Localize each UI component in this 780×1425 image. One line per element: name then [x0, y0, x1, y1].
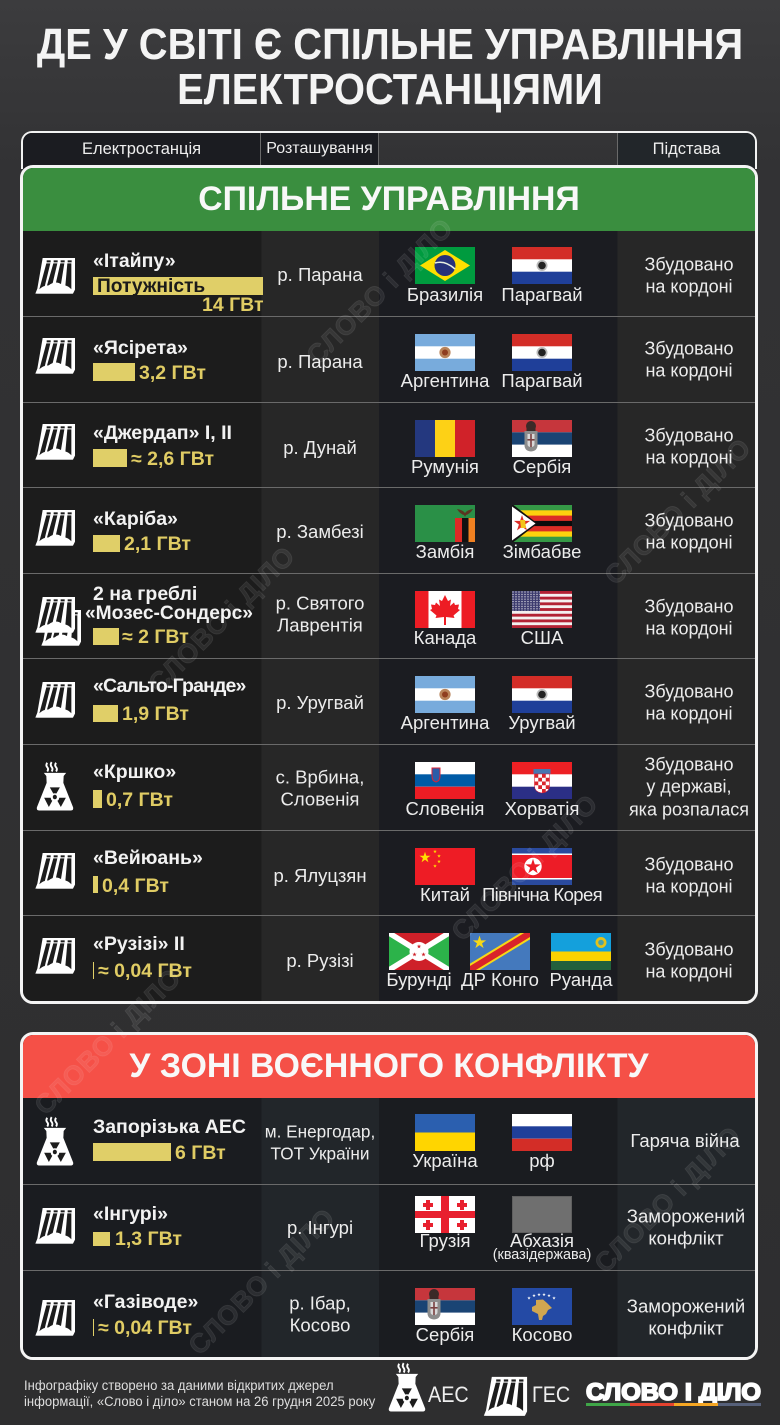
basis: Збудовано [644, 426, 734, 446]
icon: hydro plant [35, 682, 75, 718]
footer source note: інформації, «Слово і діло» станом на 26 грудня 2025 року [24, 1394, 375, 1409]
country label: Парагвай [501, 284, 583, 305]
plant name: 2 на греблі [93, 583, 197, 605]
capacity bar [93, 1319, 94, 1336]
panel: joint management [20, 165, 758, 1004]
basis: Збудовано [644, 255, 734, 275]
legend: nuclear plant: АЕС [428, 1382, 469, 1407]
location: р. Ялуцзян [273, 865, 367, 886]
basis: Збудовано [644, 855, 734, 875]
capacity bar [93, 790, 102, 808]
country label: Абхазія [510, 1230, 574, 1251]
flag: Burundi [389, 933, 449, 970]
flag: Argentina [415, 334, 475, 371]
location: р. Замбезі [276, 521, 364, 542]
country label: Парагвай [501, 370, 583, 391]
basis: Збудовано [644, 339, 734, 359]
country label: Зімбабве [503, 541, 581, 562]
row: Moses-Saunders [23, 573, 755, 658]
location: р. Святого [276, 593, 364, 614]
flag: Kosovo [512, 1288, 572, 1325]
country label: Китай [420, 884, 470, 905]
basis: на кордоні [645, 619, 733, 639]
flag: Croatia [512, 762, 572, 799]
capacity bar [93, 962, 94, 979]
capacity bar [93, 705, 118, 722]
basis: Заморожений [627, 1206, 745, 1227]
row: Krsko [23, 744, 755, 830]
basis: на кордоні [645, 704, 733, 724]
country label: Північна Корея [482, 884, 602, 905]
flag: Zambia [415, 505, 475, 542]
basis: Збудовано [644, 511, 734, 531]
icon: hydro plant [35, 853, 75, 889]
basis: Заморожений [627, 1296, 745, 1317]
capacity value: 1,9 ГВт [122, 703, 189, 725]
row: Zaporizhzhia NPP [23, 1098, 755, 1184]
plant name: «Кршко» [93, 761, 176, 783]
status note: (квазідержава) [493, 1247, 591, 1263]
country label: ДР Конго [461, 969, 539, 990]
basis: на кордоні [645, 533, 733, 553]
watermarks: СЛОВО і ДІЛО [446, 789, 604, 947]
icon: hydro plant [30, 1294, 85, 1342]
location: р. Рузізі [286, 950, 354, 971]
capacity bar [93, 628, 119, 645]
capacity bar [93, 1143, 171, 1161]
capacity value: 0,7 ГВт [106, 789, 173, 811]
flag: Canada [415, 591, 475, 628]
flag: Slovenia [415, 762, 475, 799]
title: ДЕ У СВІТІ Є СПІЛЬНЕ УПРАВЛІННЯ [37, 21, 743, 69]
row: Itaipu [23, 231, 755, 316]
row: Yacyreta [23, 316, 755, 402]
flag: Brazil [415, 247, 475, 284]
logo: Slovo i Dilo: СЛОВО І ДІЛО [586, 1379, 761, 1406]
watermarks: СЛОВО і ДІЛО [143, 541, 301, 699]
flag: Zimbabwe [512, 505, 572, 542]
capacity value: ≈ 2 ГВт [122, 626, 189, 648]
basis: на кордоні [645, 277, 733, 297]
basis [644, 426, 734, 468]
location: р. Парана [277, 351, 363, 372]
plant name: «Сальто-Гранде» [93, 675, 246, 697]
country label: Словенія [406, 798, 484, 819]
icon: hydro plant [35, 938, 75, 974]
location: р. Ібар, [289, 1293, 351, 1314]
country label: Косово [512, 1324, 572, 1345]
basis: на кордоні [645, 877, 733, 897]
basis [629, 755, 749, 820]
capacity value: ≈ 0,04 ГВт [98, 960, 192, 982]
country label: Уругвай [508, 712, 576, 733]
capacity bar [93, 449, 127, 467]
plant name [85, 583, 253, 624]
capacity value: ≈ 2,6 ГВт [131, 448, 214, 470]
location: ТОТ України [270, 1144, 370, 1164]
basis [627, 1206, 745, 1250]
capacity value: 14 ГВт [202, 294, 264, 316]
country label: Грузія [420, 1230, 470, 1251]
plant name: Запорізька АЕС [93, 1116, 246, 1138]
location: р. Парана [277, 264, 363, 285]
location: р. Інгурі [287, 1217, 353, 1238]
capacity value: 3,2 ГВт [139, 362, 206, 384]
flag: Romania [415, 420, 475, 457]
flag: Rwanda [551, 933, 611, 970]
capacity bar [93, 1232, 110, 1246]
watermarks: СЛОВО і ДІЛО [183, 1203, 341, 1361]
country label: Румунія [411, 456, 479, 477]
flag: China [415, 848, 475, 885]
row: Djerdap [23, 402, 755, 487]
icon: hydro plant [35, 424, 75, 460]
heading: war conflict zone: У ЗОНІ ВОЄННОГО КОНФЛІКТУ [129, 1047, 649, 1085]
flag: Serbia [512, 420, 572, 457]
plant name: «Ясірета» [93, 337, 188, 359]
basis: Гаряча війна [630, 1130, 740, 1151]
column header: location [261, 133, 379, 169]
country label: Хорватія [505, 798, 579, 819]
location: Лаврентія [277, 615, 363, 636]
flag: Georgia [415, 1196, 475, 1233]
location [289, 1293, 351, 1337]
country label: рф [529, 1150, 555, 1171]
watermarks: СЛОВО і ДІЛО [599, 433, 757, 591]
column header: basis: Підстава [653, 140, 720, 158]
icon: hydro plant [35, 510, 75, 546]
plant name: «Вейюань» [93, 847, 203, 869]
basis: на кордоні [645, 448, 733, 468]
icon: two hydro plants [35, 597, 81, 646]
country label: Бурунді [386, 969, 452, 990]
basis: Збудовано [644, 682, 734, 702]
capacity value: 1,3 ГВт [115, 1228, 182, 1250]
plant name: «Мозес-Сондерс» [85, 603, 253, 624]
row: Kariba [23, 487, 755, 573]
icon: hydro plant [35, 338, 75, 374]
row: Enguri [23, 1184, 755, 1270]
column header: power plant [23, 133, 261, 169]
country label: Аргентина [401, 712, 489, 733]
basis: яка розпалася [629, 799, 749, 819]
table header row [21, 131, 757, 169]
location [276, 767, 364, 810]
heading: joint management [23, 168, 755, 231]
footer source note: Інфографіку створено за даними відкритих джерел [24, 1378, 334, 1393]
flag: Serbia [415, 1288, 475, 1325]
plant name: «Рузізі» II [93, 933, 185, 955]
basis: конфлікт [648, 1318, 724, 1339]
flag: Paraguay [512, 247, 572, 284]
legend: nuclear plant [381, 1359, 472, 1417]
location: м. Енергодар, [265, 1122, 375, 1142]
basis: Збудовано [644, 755, 734, 775]
footer source note [24, 1378, 375, 1410]
plant name: «Каріба» [93, 508, 178, 530]
country label: Україна [412, 1150, 478, 1171]
country label: Аргентина [401, 370, 489, 391]
plant name: «Джердап» I, II [93, 422, 232, 444]
location: Косово [290, 1315, 350, 1336]
flag: USA [512, 591, 572, 628]
capacity bar [93, 363, 134, 381]
country label: Руанда [550, 969, 612, 990]
flag: Argentina [415, 676, 475, 713]
basis: конфлікт [648, 1228, 724, 1249]
basis [644, 682, 734, 724]
watermarks: СЛОВО і ДІЛО [589, 1121, 747, 1279]
basis [644, 939, 734, 983]
basis [627, 1296, 745, 1340]
capacity bar with label [93, 277, 263, 295]
capacity value: ≈ 0,04 ГВт [98, 1317, 192, 1339]
country label: Сербія [416, 1324, 474, 1345]
country label: Бразилія [407, 284, 483, 305]
location: с. Врбина, [276, 767, 364, 788]
flag: russia [512, 1114, 572, 1151]
country label: Замбія [416, 541, 474, 562]
title: ЕЛЕКТРОСТАНЦІЯМИ [177, 66, 603, 114]
flag: Ukraine [415, 1114, 475, 1151]
capacity value: 0,4 ГВт [102, 875, 169, 897]
basis: Збудовано [644, 597, 734, 617]
basis: у державі, [646, 777, 732, 797]
row: Salto Grande [23, 658, 755, 744]
location: Словенія [281, 789, 359, 810]
plant name: «Ітайпу» [93, 250, 176, 272]
watermarks: СЛОВО і ДІЛО [29, 963, 187, 1121]
column header: power plant: Електростанція [82, 140, 201, 158]
icon: hydro plant [35, 258, 75, 294]
country label: Канада [414, 627, 476, 648]
flag: Paraguay [512, 334, 572, 371]
watermarks: СЛОВО і ДІЛО [301, 213, 459, 371]
country label: Сербія [513, 456, 571, 477]
row: Gazivode [23, 1270, 755, 1357]
basis: на кордоні [645, 962, 733, 982]
flag: DR Congo [470, 933, 530, 970]
column header: location: Розташування [266, 140, 373, 157]
title [37, 21, 743, 114]
capacity value: 2,1 ГВт [124, 533, 191, 555]
basis: на кордоні [645, 361, 733, 381]
capacity bar [93, 876, 98, 893]
legend: hydro plant: ГЕС [532, 1382, 570, 1407]
capacity value: 6 ГВт [175, 1142, 226, 1164]
basis [644, 511, 734, 553]
heading: joint management: СПІЛЬНЕ УПРАВЛІННЯ [198, 180, 580, 218]
basis [644, 255, 734, 297]
flag: Paraguay [512, 676, 572, 713]
plant name: «Газіводе» [93, 1291, 198, 1313]
location [265, 1121, 375, 1165]
country label: США [521, 627, 563, 648]
icon: nuclear plant [29, 1113, 81, 1171]
capacity bar with label: Потужність [97, 276, 205, 297]
flag: North Korea [512, 848, 572, 885]
location: р. Дунай [283, 437, 357, 458]
basis [644, 855, 734, 897]
plant name: «Інгурі» [93, 1203, 168, 1225]
row: Ruzizi [23, 915, 755, 1001]
basis: Збудовано [644, 940, 734, 960]
column header: basis [617, 133, 755, 169]
panel: war conflict zone [20, 1032, 758, 1360]
icon: nuclear plant [36, 762, 74, 810]
flag placeholder: Abkhazia [512, 1196, 572, 1233]
basis [644, 597, 734, 639]
icon: hydro plant [30, 1202, 85, 1250]
heading: war conflict zone [23, 1035, 755, 1098]
basis [644, 339, 734, 381]
location [276, 593, 364, 636]
legend: hydro plant [478, 1370, 572, 1423]
row: Weiyuan [23, 830, 755, 915]
capacity bar [93, 535, 120, 552]
location: р. Уругвай [276, 692, 364, 713]
